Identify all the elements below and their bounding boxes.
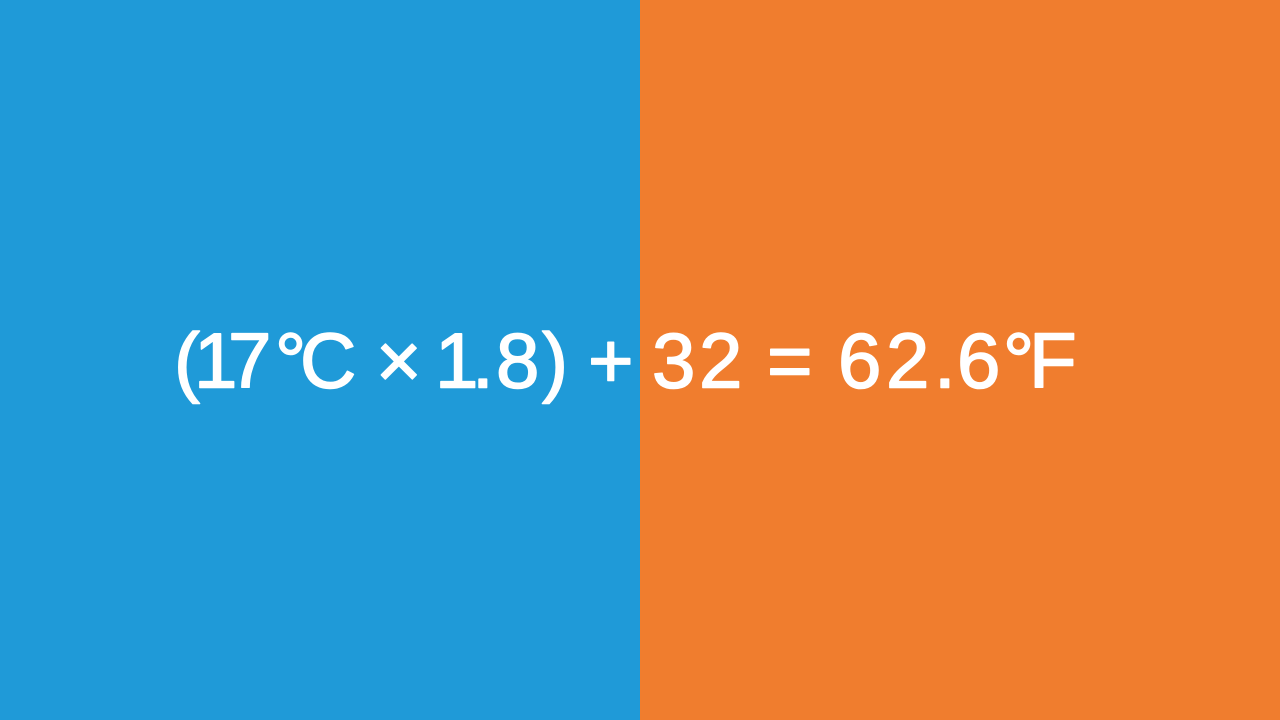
formula: Celsius to Fahrenheit conversion: (17°C × 1.8) + 32 = 62.6°F [174, 316, 1077, 404]
panel: right orange background [640, 0, 1280, 720]
panel: left blue background [0, 0, 640, 720]
